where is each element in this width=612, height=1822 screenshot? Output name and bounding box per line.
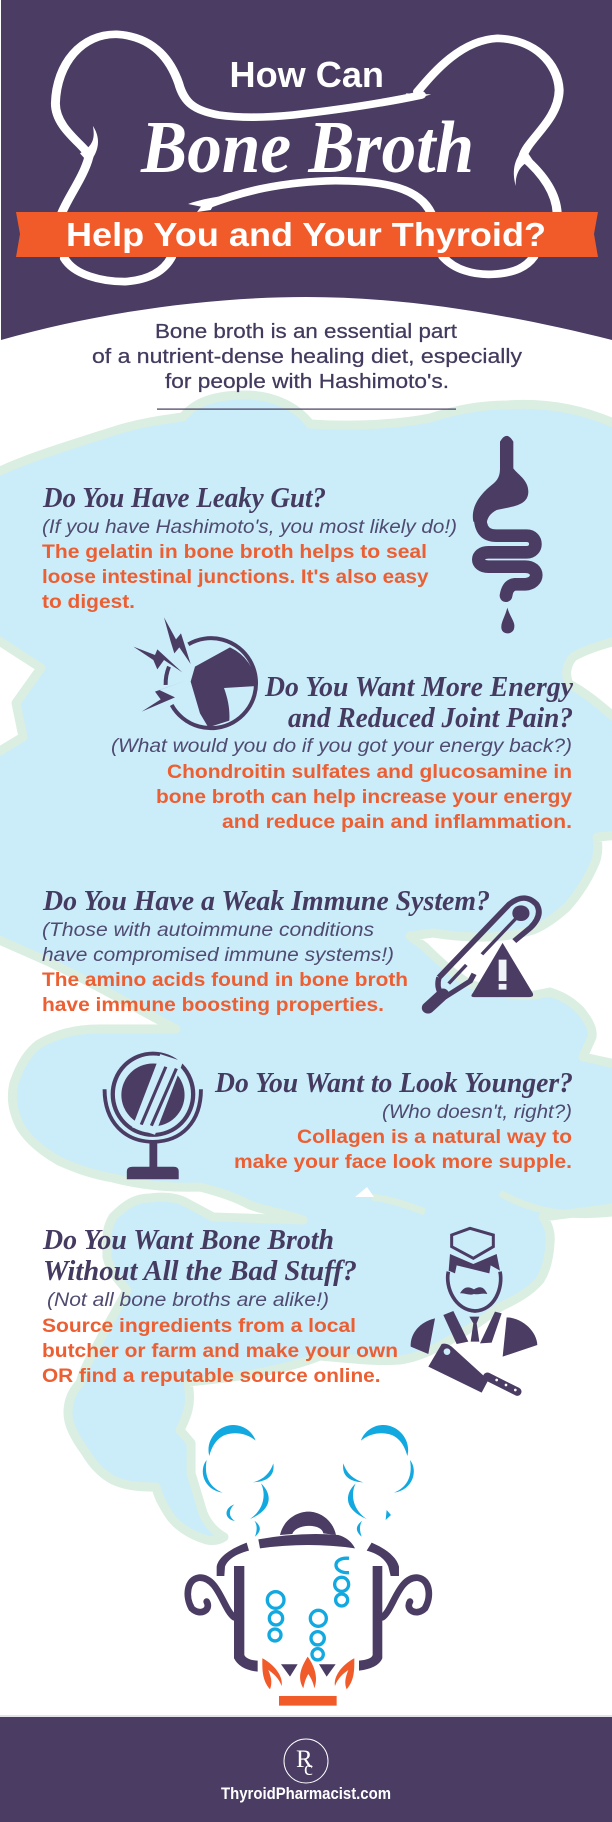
icon: pot of broth [188,1425,429,1706]
section: leaky gut: loose intestinal junctions. It's also easy [42,566,429,588]
section: energy and joint pain: Do You Want More Energy [264,671,573,703]
section: bone broth sourcing: OR find a reputable source online. [42,1365,380,1387]
section: bone broth sourcing [42,1224,398,1387]
section: immune system: have immune boosting properties. [42,994,384,1016]
logo: c [304,1758,313,1780]
lid and body [217,1512,399,1677]
logo: R [296,1746,313,1773]
title: Help You and Your Thyroid? [66,216,546,253]
title: Bone Broth [140,107,474,189]
section: leaky gut: The gelatin in bone broth helps to seal [42,541,427,563]
section: bone broth sourcing: Source ingredients from a local [42,1315,356,1337]
section: leaky gut: to digest. [42,591,135,613]
bubbles [267,1558,349,1660]
icon: thermometer and warning [428,898,539,1008]
section: look younger: Do You Want to Look Younger? [214,1067,573,1099]
footer [0,1715,612,1822]
section: energy and joint pain: bone broth can help increase your energy [156,786,572,808]
intro text [92,321,522,393]
section: bone broth sourcing: butcher or farm and make your own [42,1340,398,1362]
icon: knee joint [133,617,257,728]
section: leaky gut: (If you have Hashimoto's, you most likely do!) [42,517,457,538]
section: energy and joint pain: and Reduced Joint Pain? [288,702,573,734]
section: immune system [42,885,490,1016]
section: energy and joint pain: (What would you do if you got your energy back?) [111,736,572,757]
section: immune system: Do You Have a Weak Immune System? [42,885,490,917]
icon: butcher [411,1228,537,1393]
section: immune system: The amino acids found in bone broth [42,969,408,991]
cloud background [0,395,612,1541]
banner ribbon [16,212,598,257]
section: look younger: make your face look more supple. [234,1151,572,1173]
intro text: of a nutrient-dense healing diet, especially [92,346,522,368]
section: immune system: (Those with autoimmune conditions [42,920,375,941]
section: energy and joint pain: and reduce pain and inflammation. [222,811,572,833]
steam [203,1425,414,1537]
icon: mirror [105,1054,201,1179]
section: leaky gut [42,482,457,613]
logo [284,1739,328,1783]
title: How Can [230,54,384,95]
flames and burner [262,1657,354,1706]
section: leaky gut: Do You Have Leaky Gut? [42,482,326,514]
section: bone broth sourcing: Without All the Bad Stuff? [43,1255,357,1287]
section: energy and joint pain: Chondroitin sulfates and glucosamine in [167,761,572,783]
section: look younger: (Who doesn't, right?) [382,1102,572,1123]
intro text: Bone broth is an essential part [155,321,457,343]
section: look younger: Collagen is a natural way to [297,1126,572,1148]
section: look younger [214,1067,573,1173]
icon: intestine [473,436,536,633]
section: energy and joint pain [111,671,573,833]
section: bone broth sourcing: (Not all bone broths are alike!) [47,1290,329,1311]
section: bone broth sourcing: Do You Want Bone Broth [42,1224,334,1256]
footer: ThyroidPharmacist.com [221,1784,391,1803]
intro text: for people with Hashimoto's. [165,371,449,393]
title [66,54,546,253]
header background [1,0,612,340]
bone outline [55,34,559,282]
pot handles [188,1578,429,1617]
section: immune system: have compromised immune systems!) [42,945,394,966]
